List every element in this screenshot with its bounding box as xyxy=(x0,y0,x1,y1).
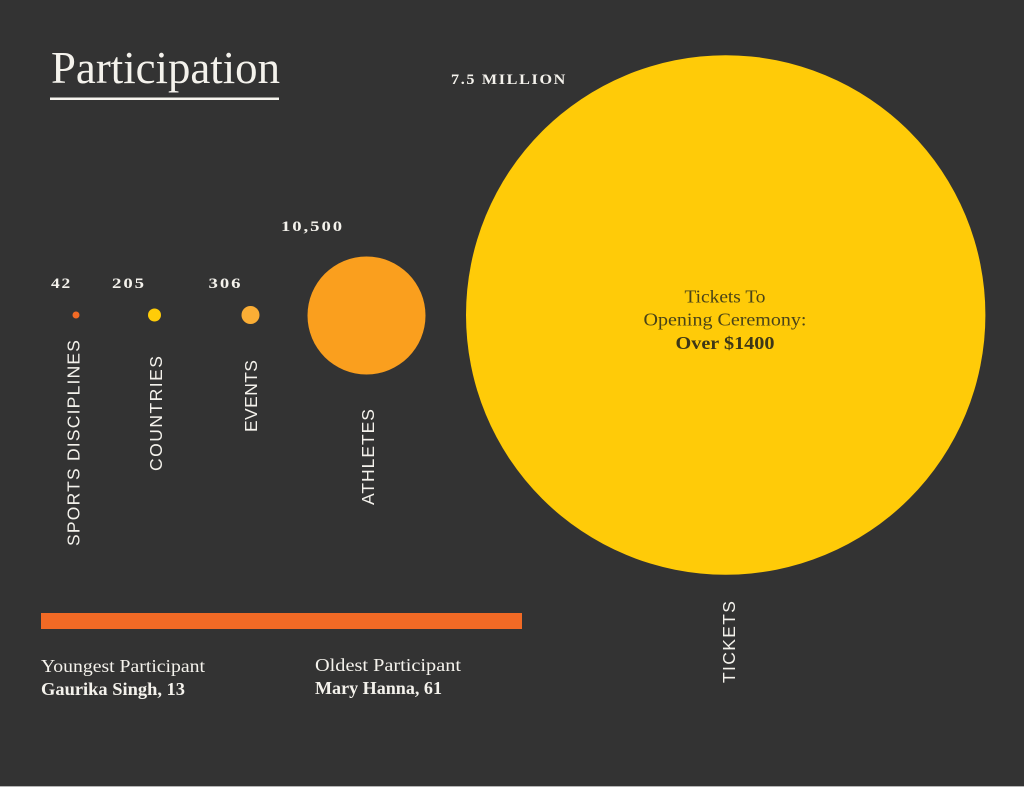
value: countries: 205 xyxy=(112,276,146,292)
circle: athletes xyxy=(308,256,426,374)
youngest participant: Gaurika Singh, 13 xyxy=(41,679,185,699)
oldest participant: Oldest Participant xyxy=(315,655,461,675)
circle: tickets xyxy=(466,55,985,575)
callout: opening ceremony price: Over $1400 xyxy=(676,333,774,353)
callout: opening ceremony price: Opening Ceremony: xyxy=(644,310,806,330)
label: athletes: ATHLETES xyxy=(358,409,378,505)
circle: countries xyxy=(148,308,161,322)
circle: sports disciplines xyxy=(72,312,80,318)
title: Participation xyxy=(51,42,280,93)
oldest participant: Mary Hanna, 61 xyxy=(315,678,442,698)
label: sports disciplines: SPORTS DISCIPLINES xyxy=(64,340,84,546)
circle: events xyxy=(242,306,260,324)
age range bar xyxy=(41,613,522,629)
youngest participant xyxy=(41,656,205,699)
label: tickets: TICKETS xyxy=(719,601,739,683)
value: events: 306 xyxy=(208,276,242,292)
callout: opening ceremony price xyxy=(644,286,806,353)
value: athletes: 10,500 xyxy=(281,219,344,235)
oldest participant xyxy=(315,655,461,698)
value: tickets: 7.5 MILLION xyxy=(451,72,567,88)
label: events: EVENTS xyxy=(241,360,261,432)
youngest participant: Youngest Participant xyxy=(41,656,205,676)
label: countries: COUNTRIES xyxy=(146,356,166,471)
value: sports disciplines: 42 xyxy=(51,276,72,292)
callout: opening ceremony price: Tickets To xyxy=(684,286,766,306)
